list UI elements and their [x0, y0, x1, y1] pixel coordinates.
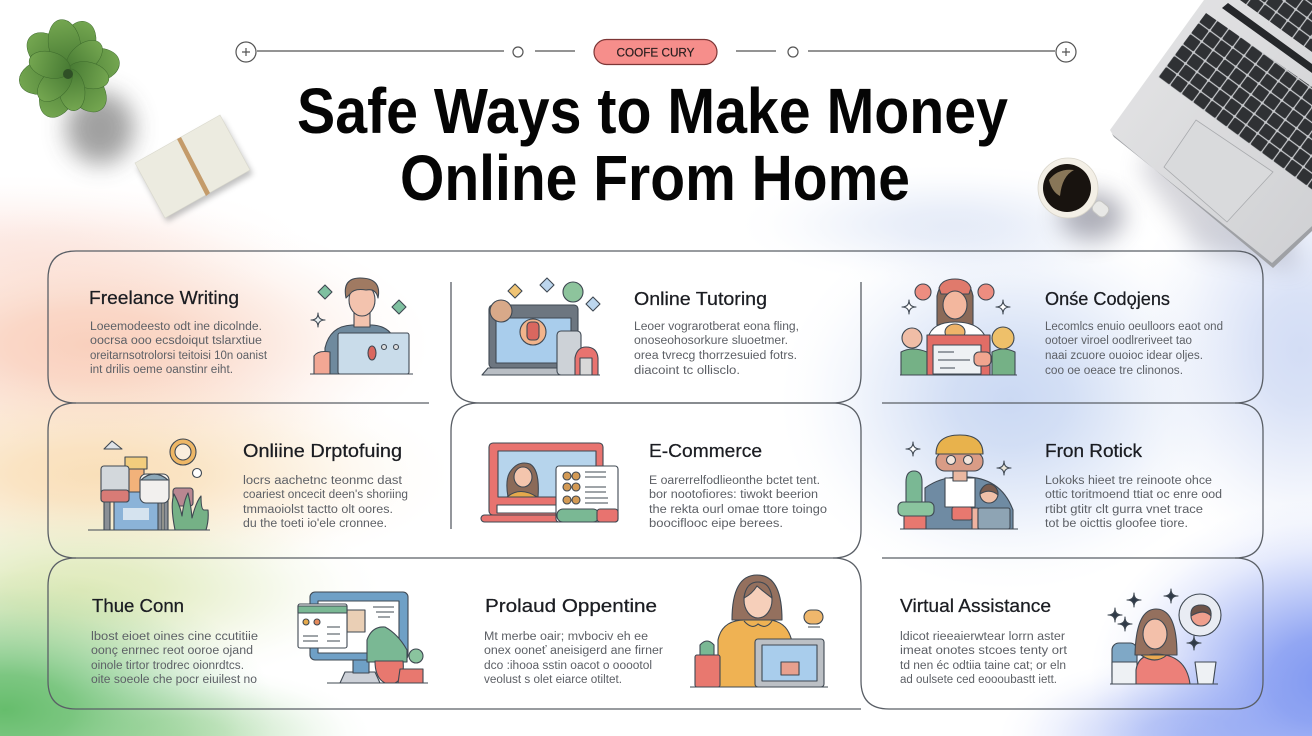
icon: man with child and cactus	[898, 435, 1018, 529]
heading: Onliine Drptofuing	[243, 441, 402, 461]
body text: diacoint tc ollisclo.	[634, 365, 740, 377]
body text	[1045, 321, 1223, 377]
body text: ootoer viroel oodlreriveet tao	[1045, 335, 1192, 347]
body text: coo oe oeace tre clinonos.	[1045, 365, 1183, 377]
decorative notebook	[135, 115, 253, 222]
body text: ad oulsete ced eoooubastt iett.	[900, 674, 1057, 686]
body text	[484, 631, 663, 686]
body text: orea tvrecg thorrzesuied fotrs.	[634, 350, 797, 362]
body text: Mt merbe oair; mvbociv eh ee	[484, 631, 648, 643]
body text: Loeemodeesto odt ine dicolnde.	[90, 321, 262, 333]
body text: lbost eioet oines cine ccutitiie	[91, 631, 258, 643]
icon: assistant with chat bubble	[1108, 589, 1221, 684]
body text: oreitarnsotrolorsi teitoisi 10n oanist	[90, 350, 268, 362]
panel: freelance writing	[48, 251, 451, 403]
heading: Virtual Assistance	[900, 596, 1051, 616]
icon: man at laptop	[310, 278, 413, 374]
heading: Fron Rotick	[1045, 441, 1143, 461]
body text	[90, 321, 268, 376]
icon: laptop with tutor	[482, 278, 600, 375]
body text: coariest oncecit deen's shoriing	[243, 489, 408, 501]
body text: oinole tirtor trodrec oionrdtcs.	[91, 660, 244, 672]
heading: Online Tutoring	[634, 289, 767, 309]
icon: group with document	[900, 279, 1017, 375]
panel: online tutoring	[451, 251, 861, 403]
body text: veolust s olet eiarce otiltet.	[484, 674, 622, 686]
body text: oocrsa ooo ecsdoiqut tslarxtiue	[90, 335, 262, 347]
heading: Prolaud Oppentine	[485, 596, 657, 616]
body text	[900, 631, 1068, 686]
heading: E-Commerce	[649, 441, 762, 461]
panel: online dropshipping	[48, 403, 833, 558]
body text: the rekta ourl omae ttore toingo	[649, 504, 827, 516]
body text: td nen éc odtiia taine cat; or eln	[900, 660, 1066, 672]
body text: onoseohosorkure sluoetmer.	[634, 335, 788, 347]
body text	[634, 321, 799, 377]
panel: virtual assistance	[889, 558, 1263, 709]
panel: e-commerce	[451, 403, 861, 558]
title: Online From Home	[400, 142, 910, 214]
decorative coffee cup	[1038, 158, 1124, 240]
panel: proloud oppentine	[484, 558, 889, 709]
icon: shop machines and plant	[88, 439, 210, 530]
header ornament and badge	[236, 40, 1076, 64]
body text: Lecomlcs enuio oeulloors eaot ond	[1045, 321, 1223, 333]
title: Safe Ways to Make Money	[297, 75, 1008, 147]
body text: oite soeole che pocr eiuilest no	[91, 674, 257, 686]
panel: front rolick	[882, 403, 1263, 558]
decorative laptop	[1110, 0, 1312, 270]
body text: bor nootofiores: tiwokt beerion	[649, 489, 818, 501]
decorative plant: potted leaves from above	[15, 16, 134, 164]
body text: E oarerrelfodlieonthe bctet tent.	[649, 475, 820, 487]
icon: desktop monitor with windows and plant	[298, 592, 428, 683]
heading: Freelance Writing	[89, 288, 239, 308]
panel: online coupons	[861, 251, 1263, 403]
icon: storefront screen with product list	[481, 443, 618, 522]
body text: tot be oicttis gloofee tiore.	[1045, 518, 1188, 530]
body text	[1045, 475, 1222, 530]
badge: COOFE CURY	[616, 48, 695, 60]
body text	[649, 475, 827, 530]
body text: oonç enrnec reot ooroe ojand	[91, 645, 253, 657]
panel: thue conn	[48, 558, 861, 709]
icon: woman with laptop	[690, 575, 828, 687]
body text: imeat onotes stcoes tenty ort	[900, 645, 1068, 657]
heading: Onśe Codǫjens	[1045, 289, 1170, 309]
body text	[91, 631, 258, 686]
body text: dco :ihooa sstin oacot o ooootol	[484, 660, 652, 672]
badge	[594, 40, 717, 64]
body text: Lokoks hieet tre reinoote ohce	[1045, 475, 1212, 487]
body text: tmmaoiolst tactto olt oores.	[243, 504, 393, 516]
body text	[243, 475, 408, 530]
body text: ottic toritmoend ttiat oc enre ood	[1045, 489, 1222, 501]
body text: rtibt gtitr clt gurra vnet trace	[1045, 504, 1203, 516]
body text: onex ooneť aneisigerd ane firner	[484, 645, 663, 657]
body text: locrs aachetnc teonmc dast	[243, 475, 403, 487]
body text: naai zcuore ouoioc idear oljes.	[1045, 350, 1203, 362]
heading: Thue Conn	[92, 596, 184, 616]
body text: int drilis oeme oanstinr eiht.	[90, 364, 233, 376]
body text: ldicot rieeaierwtear lorrn aster	[900, 631, 1065, 643]
body text: Leoer vograrotberat eona fling,	[634, 321, 799, 333]
body text: du the toeti io'ele cronnee.	[243, 518, 387, 530]
body text: boociflooc eipe berees.	[649, 518, 783, 530]
title	[297, 75, 1008, 214]
